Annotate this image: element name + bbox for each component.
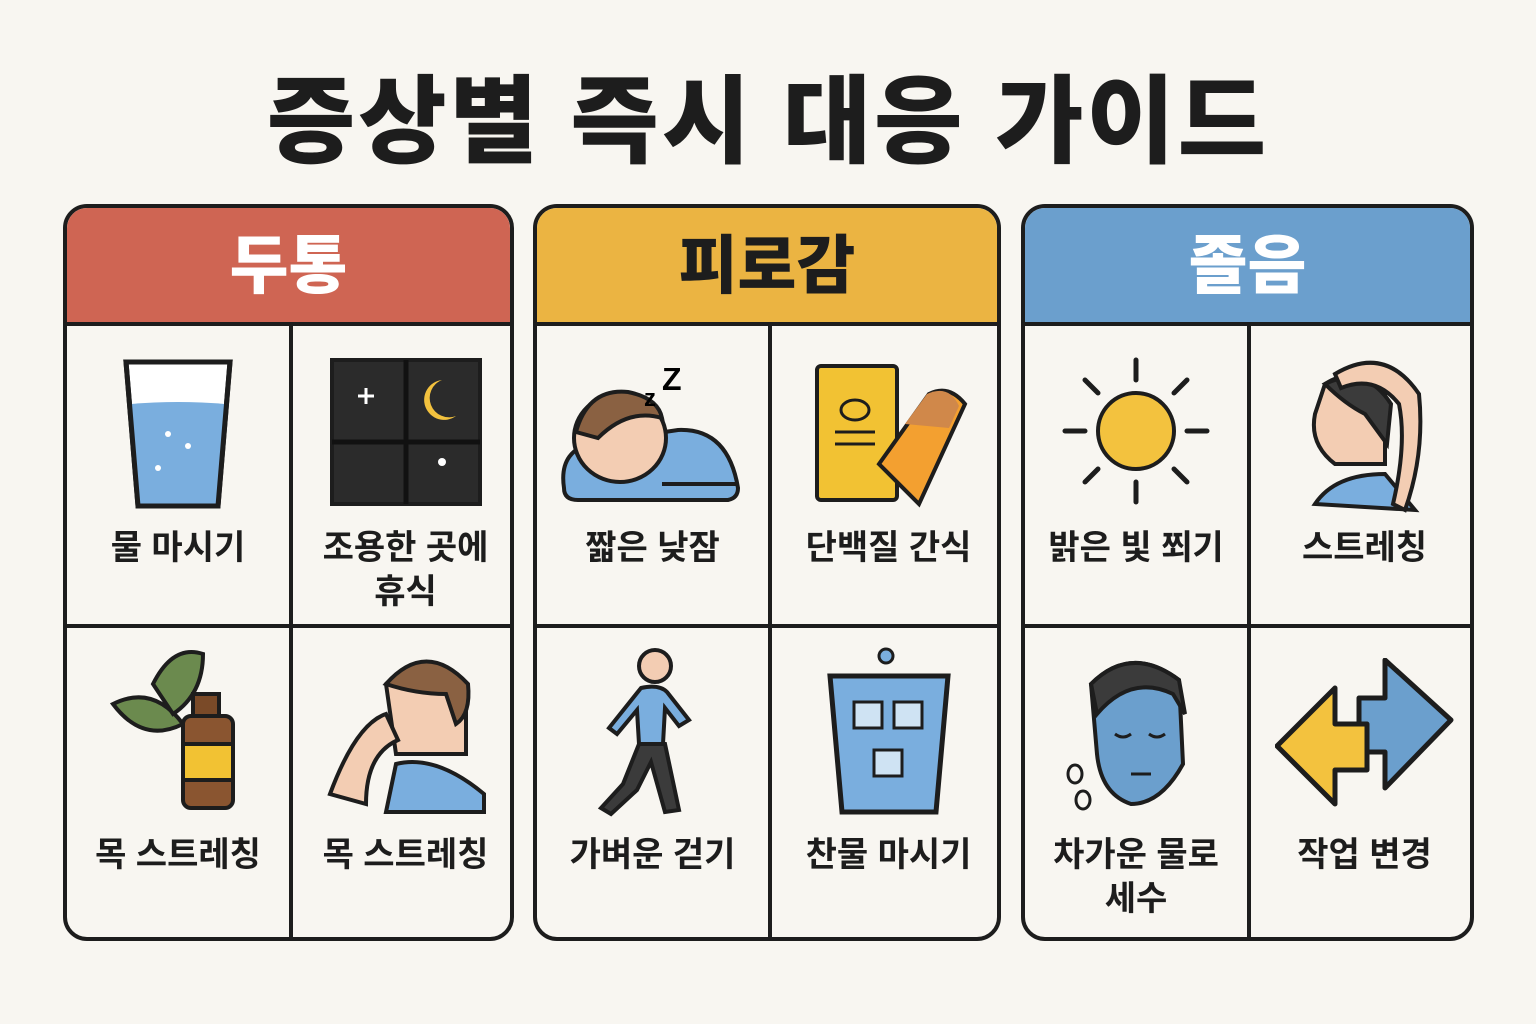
icon: sleeping person: z bbox=[644, 385, 656, 412]
header: headache: 두통 bbox=[230, 230, 347, 302]
cell: bright light: 밝은 빛 쬐기 bbox=[1048, 529, 1224, 567]
header: drowsiness: 졸음 bbox=[1189, 230, 1306, 302]
cell: bright light bbox=[1048, 358, 1224, 567]
cell: stretching bbox=[1302, 360, 1427, 567]
cell: drink cold water: 찬물 마시기 bbox=[806, 836, 971, 874]
cell: short nap: 짧은 낮잠 bbox=[585, 529, 720, 567]
cell: drink water: 물 마시기 bbox=[111, 529, 245, 567]
cell: stretching: 스트레칭 bbox=[1302, 529, 1427, 567]
icon: two arrows bbox=[1275, 658, 1454, 806]
cell: drink water bbox=[111, 360, 245, 567]
panel: drowsiness bbox=[1021, 204, 1474, 941]
icon: sun bbox=[1062, 358, 1210, 504]
cell: light walk bbox=[570, 648, 735, 874]
cell: drink cold water bbox=[806, 648, 971, 874]
icon: face with water bbox=[1066, 660, 1187, 810]
cell: neck stretching: 목 스트레칭 bbox=[323, 836, 488, 874]
header: headache bbox=[67, 208, 510, 326]
cell: neck stretching bbox=[323, 660, 488, 874]
icon: person stretching arm bbox=[1312, 360, 1422, 513]
cell: neck stretching (oil): 목 스트레칭 bbox=[95, 836, 261, 874]
cell: wash with cold water: 세수 bbox=[1105, 880, 1167, 918]
icon: walking person bbox=[598, 648, 692, 816]
cell: wash with cold water bbox=[1053, 660, 1219, 918]
cell: short nap bbox=[561, 368, 740, 567]
icon: night window bbox=[330, 358, 482, 506]
header: drowsiness bbox=[1025, 208, 1470, 326]
cell: rest in quiet place: 휴식 bbox=[374, 573, 437, 611]
icon: ice water glass bbox=[827, 648, 951, 814]
header: fatigue: 피로감 bbox=[679, 230, 855, 302]
cell: protein snack bbox=[806, 364, 971, 567]
cell: rest in quiet place bbox=[323, 358, 488, 611]
icon: person holding head bbox=[327, 660, 486, 814]
panel: headache bbox=[63, 204, 514, 941]
cell: wash with cold water: 차가운 물로 bbox=[1053, 836, 1219, 874]
icon: snack bars bbox=[815, 364, 968, 508]
cell: protein snack: 단백질 간식 bbox=[806, 529, 971, 567]
cell: light walk: 가벼운 걷기 bbox=[570, 836, 735, 874]
icon: glass of water bbox=[123, 360, 233, 508]
cell: neck stretching (oil) bbox=[95, 650, 261, 874]
cell: rest in quiet place: 조용한 곳에 bbox=[323, 529, 488, 567]
header: fatigue bbox=[537, 208, 997, 326]
title: 증상별 즉시 대응 가이드 bbox=[267, 69, 1269, 176]
cell: change task: 작업 변경 bbox=[1297, 836, 1432, 874]
cell: change task bbox=[1275, 658, 1454, 874]
panel: fatigue bbox=[533, 204, 1001, 941]
icon: herb leaves and bottle bbox=[110, 650, 235, 810]
icon: sleeping person bbox=[561, 368, 740, 502]
